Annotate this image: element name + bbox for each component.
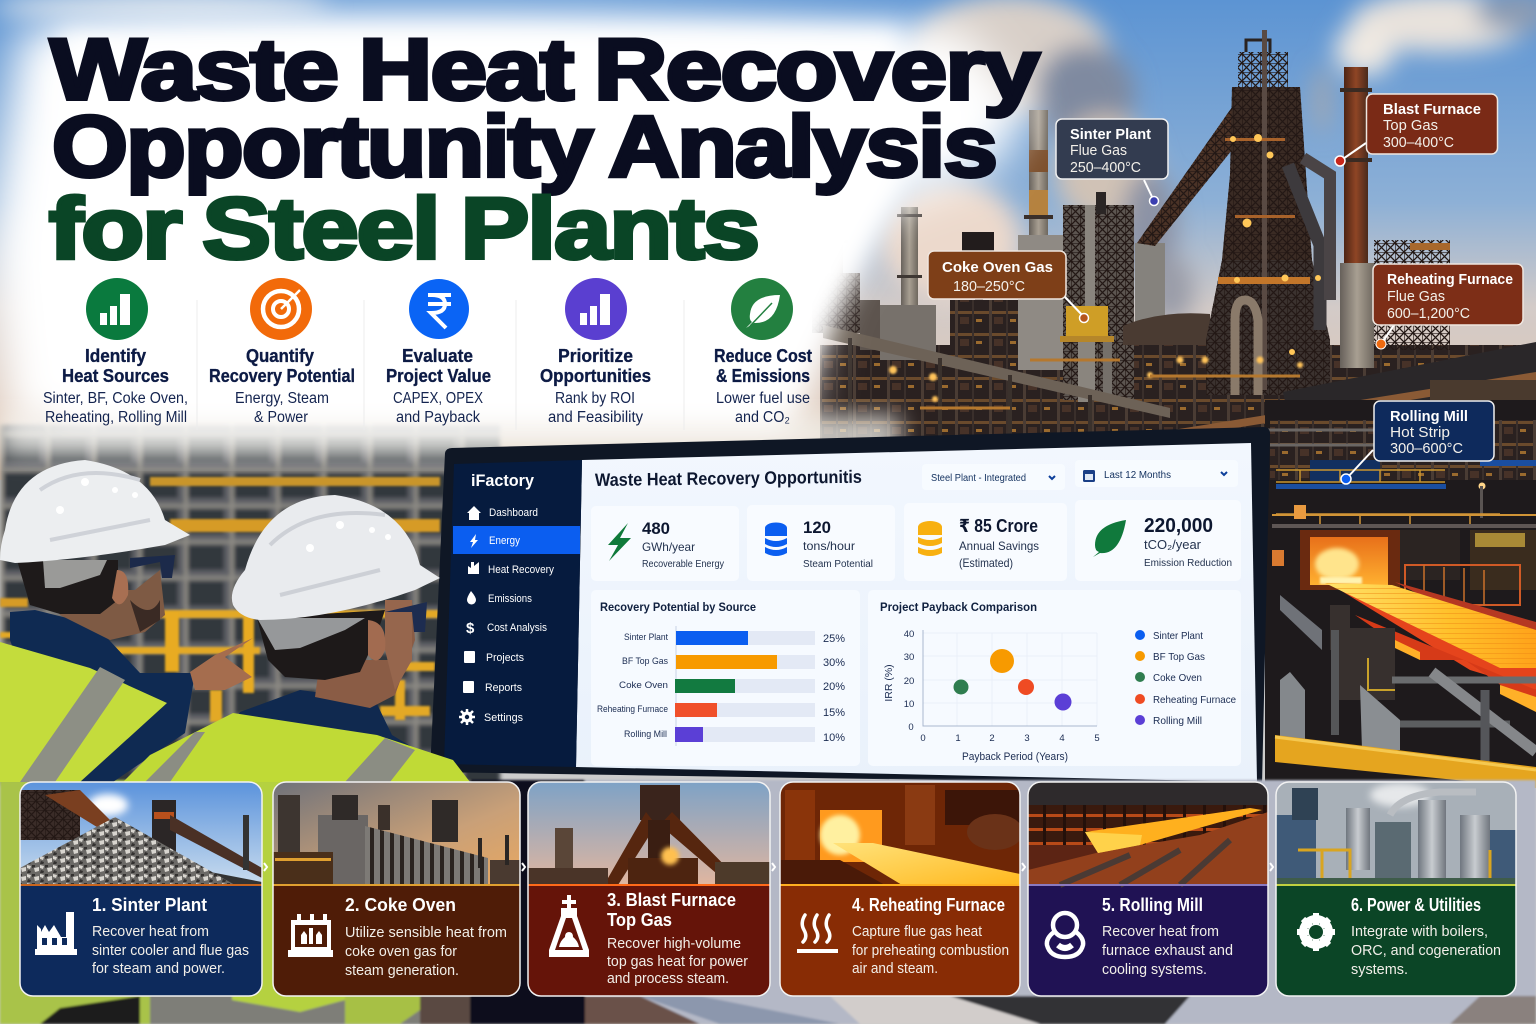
card 3: blast furnace top gas: and process steam. — [607, 970, 729, 987]
chart: project payback comparison: IRR (%) — [883, 664, 895, 702]
chart: project payback comparison: Sinter Plant — [1153, 630, 1203, 642]
KPI: annual savings — [904, 503, 1067, 581]
card 4: reheating furnace: air and steam. — [852, 960, 938, 977]
chart: project payback comparison: BF Top Gas — [1153, 651, 1205, 663]
chart: project payback comparison — [868, 590, 1241, 766]
card 6: power and utilities — [1276, 782, 1516, 996]
KPI: emission reduction: Emission Reduction — [1144, 557, 1232, 569]
callout: coke oven gas: 180–250°C — [953, 278, 1025, 295]
callout: reheating furnace — [1373, 264, 1523, 349]
KPI: recoverable energy — [591, 506, 739, 581]
step: evaluate project value: Project Value — [386, 366, 491, 386]
step: identify heat sources: Reheating, Rolling Mill — [45, 409, 187, 426]
title line 3: for Steel Plants — [49, 181, 758, 277]
date dropdown: Last 12 Months — [1104, 470, 1171, 481]
callout: rolling mill: Rolling Mill — [1390, 408, 1468, 425]
card 1: sinter plant: 1. Sinter Plant — [92, 895, 207, 915]
arrows between cards — [264, 863, 1273, 871]
card 5: rolling mill — [1028, 782, 1268, 996]
chart: recovery potential by source: Coke Oven — [619, 680, 668, 691]
KPI: annual savings: ₹ 85 Crore — [959, 516, 1038, 536]
card 2: coke oven — [273, 782, 520, 996]
KPI: annual savings: (Estimated) — [959, 556, 1013, 570]
sidebar menu: Projects — [486, 652, 524, 664]
hard hat — [0, 460, 190, 563]
callout: reheating furnace: Reheating Furnace — [1387, 271, 1513, 288]
step: evaluate project value: Evaluate — [402, 346, 473, 366]
chart: project payback comparison: 40 — [904, 629, 914, 640]
step: identify heat sources: Sinter, BF, Coke Oven, — [43, 390, 188, 407]
plant dropdown: Steel Plant - Integrated — [931, 473, 1026, 484]
card 3: blast furnace top gas — [528, 782, 770, 996]
sidebar menu: Dashboard — [489, 507, 538, 519]
icon: gear — [1297, 913, 1335, 951]
step: reduce cost and emissions: and CO₂ — [735, 409, 790, 426]
chart: project payback comparison: 4 — [1059, 733, 1065, 744]
chart: project payback comparison: 10 — [904, 699, 914, 710]
title line 2: Opportunity Analysis — [52, 99, 996, 195]
card 4: reheating furnace: for preheating combustion — [852, 942, 1009, 959]
plant dropdown — [922, 464, 1065, 490]
callout: sinter plant: 250–400°C — [1070, 159, 1141, 176]
sidebar menu: Cost Analysis — [487, 622, 547, 634]
title line 1: Waste Heat Recovery — [50, 22, 1040, 118]
horizontal main duct — [1123, 313, 1210, 345]
step: prioritize opportunities: and Feasibility — [548, 409, 643, 426]
callouts — [928, 94, 1523, 484]
sidebar menu: Emissions — [488, 593, 532, 605]
background: blurred plant behind workers — [0, 415, 900, 785]
chart: recovery potential by source: BF Top Gas — [622, 656, 668, 667]
card 3: blast furnace top gas: 3. Blast Furnace — [607, 890, 736, 910]
background: sky and smoke clouds — [0, 0, 1536, 480]
callout: sinter plant — [1056, 119, 1168, 206]
KPI: recoverable energy: GWh/year — [642, 540, 695, 554]
step: evaluate project value: and Payback — [396, 409, 480, 426]
chart: project payback comparison: 0 — [908, 722, 914, 733]
step: prioritize opportunities: Prioritize — [558, 346, 633, 366]
icon: rolling coil — [1047, 913, 1083, 957]
sidebar menu: Settings — [484, 712, 523, 724]
card 6: power and utilities: Integrate with boilers, — [1351, 923, 1488, 940]
jacket — [10, 610, 195, 782]
sidebar active row — [453, 526, 580, 554]
worker 1 — [0, 460, 253, 782]
card 1: sinter plant: for steam and power. — [92, 960, 225, 977]
chart: recovery potential by source: 20% — [823, 681, 845, 693]
callout: sinter plant: Flue Gas — [1070, 142, 1127, 159]
vest — [0, 642, 167, 782]
left chimney and block — [950, 110, 1092, 385]
callout: blast furnace: 300–400°C — [1383, 134, 1454, 151]
card 5: rolling mill: Recover heat from — [1102, 923, 1219, 940]
chart: project payback comparison: 1 — [955, 733, 961, 744]
card 6: power and utilities: ORC, and cogeneration — [1351, 942, 1501, 959]
step: evaluate project value: CAPEX, OPEX — [393, 390, 484, 407]
card 1: sinter plant: Recover heat from — [92, 923, 209, 940]
step: quantify recovery potential: Recovery Potential — [209, 366, 355, 386]
KPI: steam potential: 120 — [803, 518, 831, 537]
monitor with dashboard — [430, 427, 1270, 785]
dashboard heading: Waste Heat Recovery Opportunitis — [595, 467, 862, 490]
card 2: coke oven: steam generation. — [345, 962, 459, 979]
process steps row — [43, 278, 812, 430]
KPI: recoverable energy: Recoverable Energy — [642, 559, 724, 570]
vest — [123, 713, 470, 782]
dashboard panel — [576, 443, 1257, 782]
card 5: rolling mill: cooling systems. — [1102, 961, 1207, 978]
card 6: power and utilities: systems. — [1351, 961, 1408, 978]
icon: furnace — [549, 895, 589, 957]
chart: project payback comparison: Rolling Mill — [1153, 715, 1202, 727]
step: quantify recovery potential — [209, 278, 355, 426]
card 4: reheating furnace: Capture flue gas heat — [852, 923, 983, 940]
callout: rolling mill: Hot Strip — [1390, 424, 1450, 441]
icon: coke oven — [288, 914, 333, 957]
callout: blast furnace: Top Gas — [1383, 117, 1438, 134]
chart: recovery potential by source: Reheating Furnace — [597, 704, 668, 715]
card 5: rolling mill: 5. Rolling Mill — [1102, 895, 1203, 915]
long roof — [1283, 342, 1536, 425]
callout: rolling mill — [1341, 401, 1494, 484]
card 4: reheating furnace — [780, 782, 1023, 996]
card 4: reheating furnace: 4. Reheating Furnace — [852, 895, 1005, 915]
sidebar menu — [484, 507, 554, 724]
callout: blast furnace: Blast Furnace — [1383, 101, 1481, 118]
monitor bezel — [430, 427, 1270, 785]
chart: project payback comparison: 5 — [1094, 733, 1100, 744]
head — [315, 600, 415, 708]
callout: coke oven gas — [928, 251, 1088, 322]
blast furnace tower — [1206, 30, 1330, 395]
chart: project payback comparison: Coke Oven — [1153, 672, 1202, 684]
KPI: steam potential: Steam Potential — [803, 559, 873, 570]
card 1: sinter plant — [20, 782, 262, 996]
tall rust chimney — [1340, 67, 1450, 368]
chart: project payback comparison: 2 — [989, 733, 995, 744]
sidebar icons — [459, 506, 481, 725]
date dropdown — [1075, 460, 1238, 487]
chart: recovery potential by source: 15% — [823, 707, 845, 719]
callout: rolling mill: 300–600°C — [1390, 440, 1463, 457]
platform lights — [889, 356, 1303, 402]
callout: coke oven gas: Coke Oven Gas — [942, 259, 1053, 276]
step: prioritize opportunities: Rank by ROI — [555, 390, 635, 407]
callout: blast furnace — [1335, 94, 1498, 166]
icon: heat waves — [797, 915, 838, 951]
card 3: blast furnace top gas: top gas heat for power — [607, 953, 748, 970]
KPI: emission reduction: tCO₂/year — [1144, 537, 1202, 552]
lower background below cards — [0, 780, 1536, 1024]
card 2: coke oven: coke oven gas for — [345, 943, 457, 960]
chart: project payback comparison: 20 — [904, 676, 914, 687]
KPI: annual savings: Annual Savings — [959, 539, 1039, 553]
card 3: blast furnace top gas: Recover high-volume — [607, 935, 741, 952]
sidebar menu: Reports — [485, 682, 522, 694]
KPI: emission reduction — [1075, 500, 1241, 581]
sidebar logo: iFactory — [471, 471, 535, 490]
chart: project payback comparison: 3 — [1024, 733, 1030, 744]
step: evaluate project value — [386, 279, 491, 426]
callout: sinter plant: Sinter Plant — [1070, 126, 1151, 143]
title — [49, 22, 1040, 277]
KPI: emission reduction: 220,000 — [1144, 515, 1213, 537]
step: reduce cost and emissions: Reduce Cost — [714, 346, 812, 366]
chart: recovery potential by source: Rolling Mill — [624, 729, 667, 740]
callout: reheating furnace: Flue Gas — [1387, 288, 1445, 305]
card 3: blast furnace top gas: Top Gas — [607, 910, 672, 930]
chart: recovery potential by source: Recovery Potential by Source — [600, 600, 756, 614]
step: identify heat sources — [43, 278, 188, 426]
step: reduce cost and emissions: Lower fuel use — [716, 390, 810, 407]
step: quantify recovery potential: Energy, Steam — [235, 390, 329, 407]
sidebar — [444, 460, 582, 767]
white haze behind title — [0, 12, 1030, 430]
worker 2 — [123, 495, 470, 782]
chart: recovery potential by source: 25% — [823, 633, 845, 645]
sidebar menu: Energy — [489, 535, 520, 547]
background: rolling mill and hot strip — [1265, 400, 1536, 788]
step: quantify recovery potential: & Power — [254, 409, 308, 426]
pointing hand — [190, 638, 253, 690]
sidebar icons: $ — [466, 620, 475, 637]
KPI: recoverable energy: 480 — [642, 519, 670, 538]
step: identify heat sources: Identify — [85, 346, 146, 366]
step: prioritize opportunities: Opportunities — [540, 366, 651, 386]
step: identify heat sources: Heat Sources — [62, 366, 169, 386]
chart: recovery potential by source: 10% — [823, 732, 845, 744]
callout: reheating furnace: 600–1,200°C — [1387, 305, 1470, 322]
KPI: steam potential — [747, 505, 895, 581]
chart: project payback comparison: Reheating Furnace — [1153, 694, 1236, 706]
hard hat — [232, 495, 440, 620]
icon: factory — [35, 912, 77, 955]
sidebar menu: Heat Recovery — [488, 564, 554, 576]
KPI: steam potential: tons/hour — [803, 539, 855, 553]
card 2: coke oven: 2. Coke Oven — [345, 895, 456, 915]
background: steel plant silhouette — [812, 30, 1536, 470]
step: prioritize opportunities — [540, 278, 651, 426]
step: reduce cost and emissions — [714, 278, 812, 426]
inclined skip bridge — [1137, 100, 1240, 246]
chart: recovery potential by source: 30% — [823, 657, 845, 669]
jacket — [123, 690, 470, 782]
chart: project payback comparison: 0 — [920, 733, 926, 744]
chart: project payback comparison: Project Payback Comparison — [880, 600, 1037, 614]
far chimneys — [812, 207, 936, 360]
card 2: coke oven: Utilize sensible heat from — [345, 924, 507, 941]
chart: project payback comparison: 30 — [904, 652, 914, 663]
sinter tower — [1060, 192, 1165, 402]
step: reduce cost and emissions: & Emissions — [716, 366, 810, 386]
chart: recovery potential by source — [591, 590, 860, 766]
card 5: rolling mill: furnace exhaust and — [1102, 942, 1233, 959]
chart: project payback comparison: Payback Period (Years) — [962, 751, 1068, 763]
head and neck — [50, 570, 165, 640]
step: quantify recovery potential: Quantify — [246, 346, 314, 366]
card 1: sinter plant: sinter cooler and flue gas — [92, 942, 249, 959]
chart: recovery potential by source: Sinter Plant — [624, 632, 668, 643]
conveyor — [823, 325, 1170, 440]
card 6: power and utilities: 6. Power & Utilities — [1351, 895, 1481, 915]
